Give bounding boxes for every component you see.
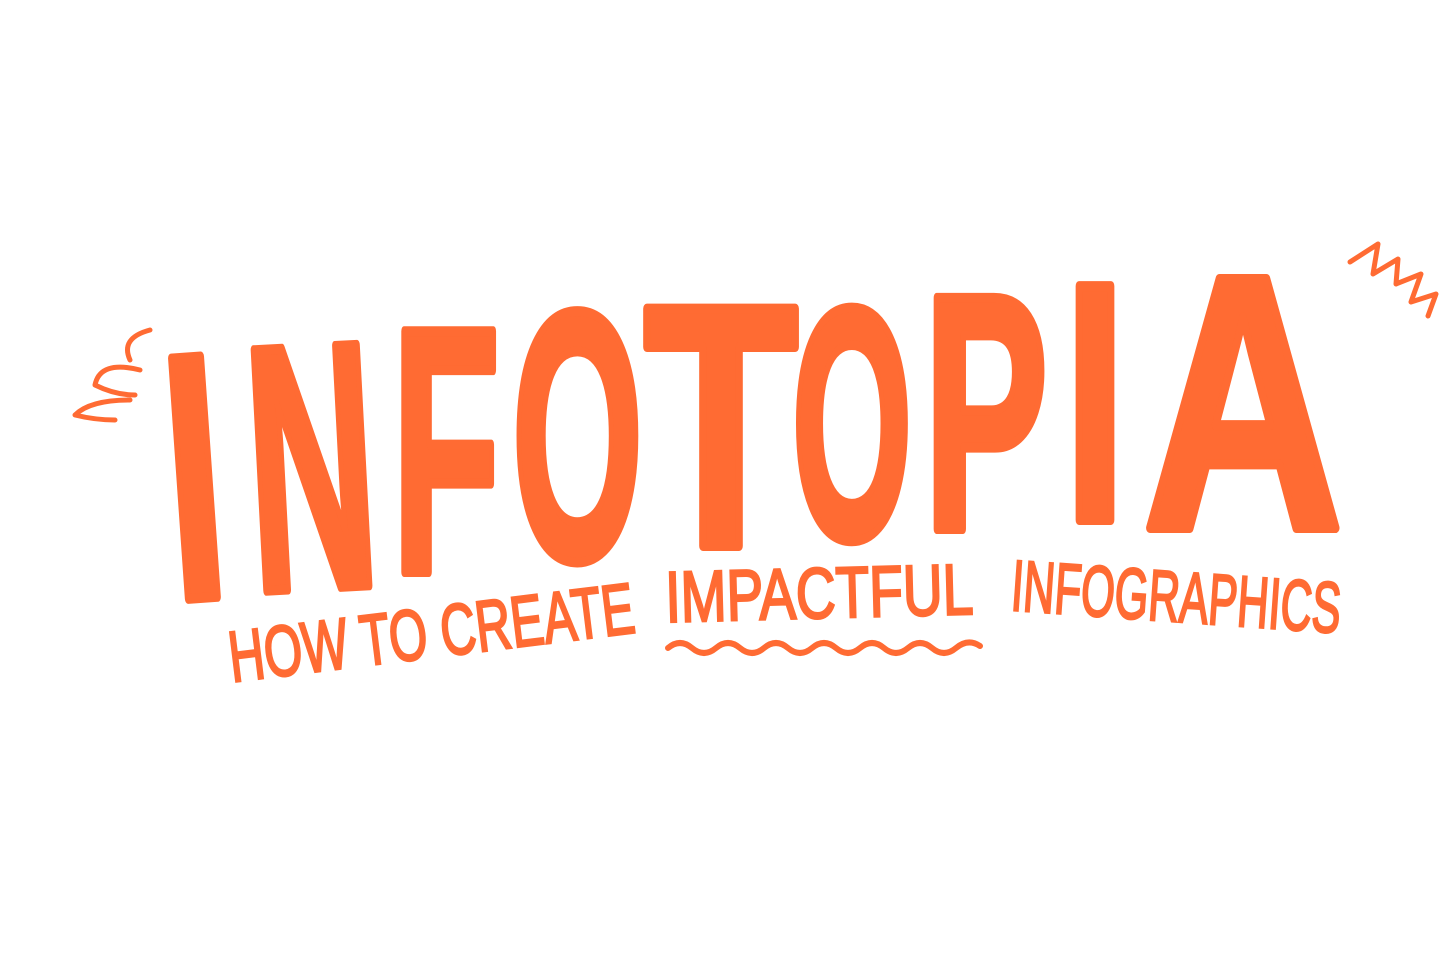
subtitle: IMPACTFUL	[664, 550, 974, 638]
title: INFOTOPIA: T	[644, 235, 798, 620]
icon: spark left	[75, 330, 150, 420]
title: INFOTOPIA: I	[1064, 213, 1126, 593]
title: INFOTOPIA: F	[392, 256, 500, 647]
subtitle: HOW TO CREATE	[224, 569, 639, 698]
title: INFOTOPIA: O	[792, 239, 912, 608]
title: INFOTOPIA: N	[237, 269, 386, 666]
icon: spark right	[1350, 244, 1436, 316]
title: INFOTOPIA: P	[924, 226, 1048, 601]
title: INFOTOPIA: I	[152, 281, 237, 675]
wavy underline	[668, 642, 980, 653]
title: INFOTOPIA: O	[512, 239, 643, 635]
subtitle	[224, 546, 1344, 698]
title: INFOTOPIA	[152, 200, 1343, 675]
title: INFOTOPIA: A	[1143, 200, 1343, 605]
